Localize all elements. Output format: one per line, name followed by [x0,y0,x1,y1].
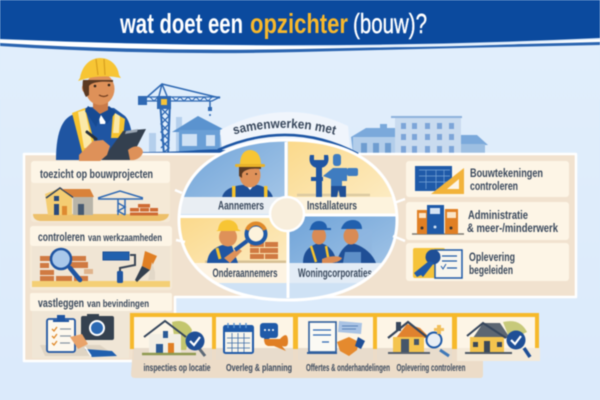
cell: inspecties op locatie [134,317,212,374]
heading [38,296,149,310]
skyline: crane and buildings [138,84,495,156]
text [469,250,515,277]
cell: final check [457,317,540,361]
title [119,8,427,39]
icon: background house [149,116,229,153]
label tab: samenwerken met: samenwerken met [232,118,337,136]
segment: Installateurs [288,138,398,214]
label: Woningcorporaties [298,268,372,280]
panel: vastleggen van bevindingen [30,293,172,358]
segment: Woningcorporaties [288,216,398,283]
heading: toezicht op bouwprojecten [40,167,153,181]
heading: van bevindingen [87,299,149,310]
header banner [0,0,600,53]
icon: tower crane [138,84,220,155]
panel: Administratie en meer-/minderwerk [406,202,569,240]
main panel [24,154,576,361]
label: Aannemers [218,200,264,212]
heading: van werkzaamheden [88,233,162,244]
text: begeleiden [469,263,513,277]
icon: right-hand buildings [351,116,488,154]
illustration: checklist and camera [40,314,117,357]
icon: key and document [413,248,462,278]
title: opzichter [250,8,348,39]
icon: blueprint and set square [415,166,464,194]
label: Onderaannemers [212,268,278,280]
label: Offertes & onderhandelingen [306,363,390,374]
label: Oplevering controleren [396,363,466,374]
label: Overleg & planning [226,363,292,374]
label: Installateurs [307,200,357,212]
panel: Bouwtekeningen controleren [406,161,569,197]
text [470,166,543,193]
segment: Onderaannemers [178,216,288,283]
panel: controleren van werkzaamheden [30,226,172,290]
title: (bouw)? [353,8,427,39]
panel: toezicht op bouwprojecten [31,161,170,222]
heading: controleren [38,230,85,244]
text [467,208,558,235]
text: Bouwtekeningen [470,166,543,180]
heading: vastleggen [38,296,84,310]
text: & meer-/minderwerk [467,221,558,235]
cell: Oplevering controleren [377,317,466,374]
text: Oplevering [469,250,515,264]
panel: Oplevering begeleiden [406,243,569,281]
title: wat doet een [119,8,243,39]
cell: Overleg & planning [216,317,293,374]
label: inspecties op locatie [144,363,211,374]
segment: Aannemers [178,138,286,214]
cell: Offertes & onderhandelingen [298,317,390,374]
bottom strip: activities [130,313,540,378]
figure: site supervisor [56,58,146,161]
heading [38,230,162,244]
text: Administratie [468,208,528,222]
illustration: brick wall, roller and brush [32,246,170,287]
text: controleren [470,179,518,193]
icon: binders [412,205,464,234]
connectors [175,190,405,242]
center hub [270,197,304,231]
panel: samenwerken met (oval) [177,112,399,302]
illustration: house and crane [33,188,169,221]
label tab: samenwerken met [219,112,350,151]
